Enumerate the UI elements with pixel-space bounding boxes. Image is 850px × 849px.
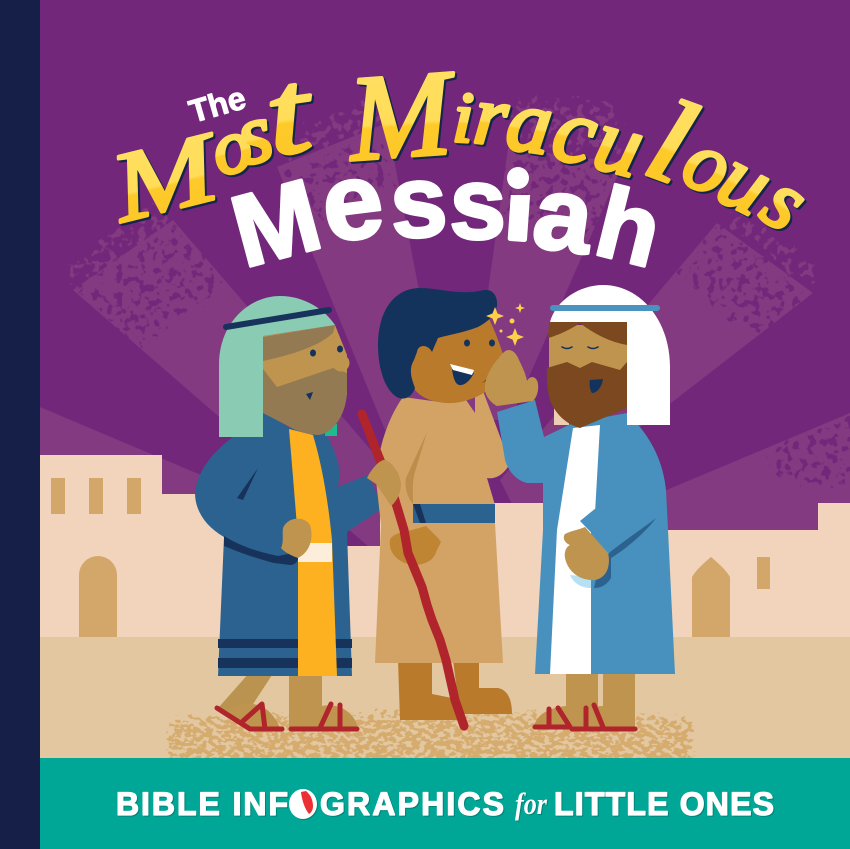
figure: healed boy: [362, 288, 512, 726]
cream belt: [298, 543, 332, 562]
Jesus sandals: [535, 705, 635, 729]
green collar: [325, 424, 337, 436]
Jesus hair: [548, 322, 627, 345]
Jesus headdress: [550, 285, 670, 425]
ground: [40, 637, 850, 759]
Jesus mouth: [590, 379, 603, 393]
sleeve: [580, 490, 652, 552]
panel: purple background: [40, 0, 850, 640]
boy hair: [378, 288, 497, 399]
neck notch: [464, 390, 475, 413]
sleeve shadow: [594, 518, 656, 588]
title: Most: t: [257, 44, 321, 181]
title: Messiah: a: [527, 154, 601, 277]
background light rays: [40, 123, 850, 600]
title: Miraculous: s: [747, 153, 824, 249]
boy hand: [390, 526, 441, 565]
bottom banner background: [40, 758, 850, 849]
ear: [416, 344, 428, 356]
gravel texture: [160, 706, 700, 780]
title: Messiah: s: [449, 146, 507, 261]
robe light shadow: [570, 575, 591, 588]
old man hair: [263, 325, 335, 361]
boy legs and feet: [398, 660, 512, 720]
neck and face skin: [263, 325, 347, 410]
Jesus robe: [497, 400, 675, 674]
boy mouth: [452, 369, 474, 385]
buildings: [40, 455, 850, 643]
boy eyes: [464, 340, 495, 347]
banner text: O: [291, 786, 316, 822]
title: Miraculous: l: [631, 73, 711, 209]
sleeve fold: [237, 468, 258, 500]
arm crease: [405, 432, 427, 504]
ray speckle texture: [50, 80, 850, 510]
building windows and doors: [51, 478, 770, 637]
title: Messiah: e: [315, 137, 389, 265]
belt shadow: [413, 504, 426, 523]
banner text: [116, 786, 774, 822]
Jesus face: [549, 325, 627, 375]
robe: [195, 412, 383, 676]
sparkles: [486, 303, 525, 346]
boy face: [408, 315, 503, 403]
title: Most: o: [203, 102, 260, 192]
hand at waist: [281, 519, 312, 558]
right leg and foot: [289, 672, 358, 729]
title: Miraculous: u: [585, 90, 654, 197]
title: Miraculous: a: [501, 72, 558, 174]
title: Miraculous: i: [451, 77, 475, 158]
title: Most: [99, 44, 321, 244]
spine: [0, 0, 40, 849]
raised hand: [485, 350, 538, 406]
headband: [226, 310, 329, 327]
Jesus hand: [564, 527, 609, 580]
tunic: [375, 383, 510, 663]
title: Messiah: M: [220, 157, 332, 289]
banner text: for: [515, 786, 548, 821]
figure: Jesus: [485, 285, 675, 729]
title: Most: s: [227, 85, 281, 183]
banner text: BIBLE INF: [116, 786, 288, 822]
title: Miraculous: u: [704, 128, 787, 235]
white stole: [550, 425, 600, 674]
title: Miraculous: [342, 45, 824, 249]
title: Miraculous: o: [671, 112, 745, 214]
headdress: [219, 296, 335, 437]
nose: [332, 354, 350, 372]
yellow stole: [289, 429, 337, 676]
eyes: [310, 346, 343, 356]
right sandal: [291, 704, 357, 729]
robe hem stripes: [218, 639, 352, 668]
neck: [554, 405, 569, 425]
left leg: [219, 672, 274, 718]
title: Miraculous: c: [545, 77, 606, 185]
figure: old man with staff: [195, 296, 383, 729]
title: Messiah: i: [501, 145, 538, 263]
Jesus beard: [547, 362, 627, 428]
boy teeth: [450, 364, 474, 375]
mouth: [306, 392, 313, 400]
nose shadow: [482, 358, 502, 383]
left sandal: [217, 704, 282, 729]
staff: [362, 414, 464, 726]
banner text: GRAPHICS: [320, 786, 504, 822]
cuff shadow: [224, 536, 299, 565]
title: Miraculous: r: [470, 68, 513, 164]
Jesus legs: [534, 670, 635, 729]
title: Most: M: [99, 112, 233, 244]
old man hand on staff: [367, 460, 401, 506]
title: The: The: [185, 79, 250, 130]
old man beard: [263, 368, 347, 435]
belt: [413, 504, 495, 523]
Jesus headband: [553, 305, 657, 311]
Jesus eyes: [562, 347, 598, 348]
title: Miraculous: M: [342, 45, 462, 187]
title: Messiah: h: [586, 166, 672, 289]
title: Messiah: s: [387, 143, 450, 260]
title: Messiah: [230, 167, 655, 268]
left foot: [228, 704, 280, 729]
banner text: LITTLE ONES: [554, 786, 774, 822]
